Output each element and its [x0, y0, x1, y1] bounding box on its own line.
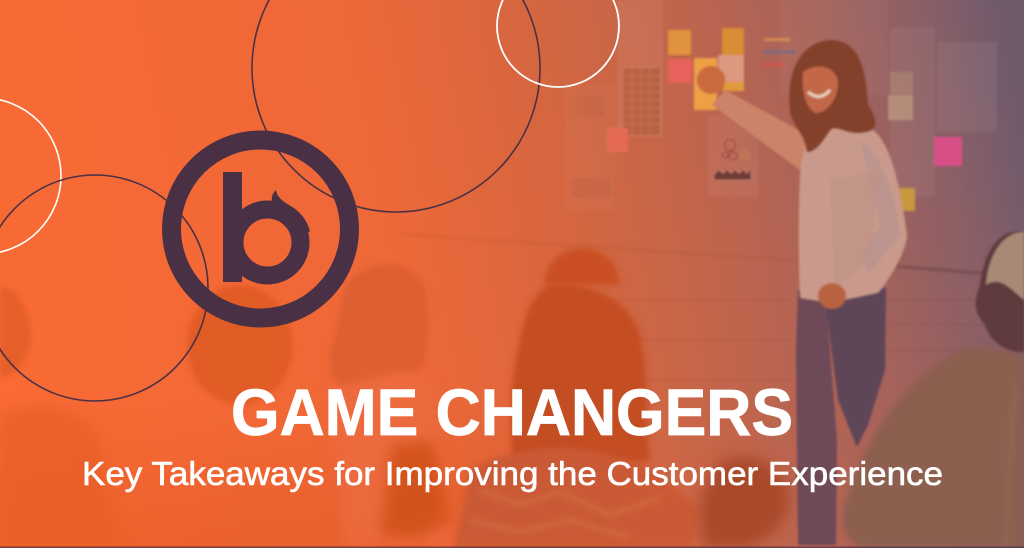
photo: seated audience	[0, 232, 1024, 548]
decorative circle: top white	[497, 0, 619, 87]
decorative circle: left white	[0, 98, 61, 254]
title: GAME CHANGERS	[231, 375, 793, 449]
audience top light	[330, 375, 455, 548]
audience man hair right	[976, 232, 1024, 352]
logo ring	[172, 140, 350, 318]
audience head far left	[0, 285, 31, 378]
subtitle: Key Takeaways for Improving the Customer Experience	[82, 455, 943, 492]
logo letter b	[223, 172, 310, 282]
audience beanie	[545, 248, 619, 285]
logo	[172, 140, 350, 318]
presenter hair and face	[789, 40, 875, 152]
decorative circle: left navy	[0, 175, 208, 401]
presenter jeans	[796, 288, 886, 545]
audience body left	[0, 407, 118, 548]
audience dark shirt	[380, 440, 452, 538]
audience patterned sweater	[455, 448, 700, 548]
presenter shirt and arm	[697, 66, 907, 309]
audience dark head	[700, 457, 789, 548]
audience front hair	[511, 284, 650, 480]
bottom edge	[0, 546, 1024, 548]
audience head center left	[187, 285, 293, 405]
audience long hair	[330, 265, 428, 390]
audience man jacket right	[843, 348, 1024, 548]
decorative circle: large navy	[252, 0, 540, 212]
lower shade	[0, 400, 620, 548]
photo: wall with papers and sticky notes	[400, 0, 997, 380]
photo: presenter	[697, 40, 907, 545]
